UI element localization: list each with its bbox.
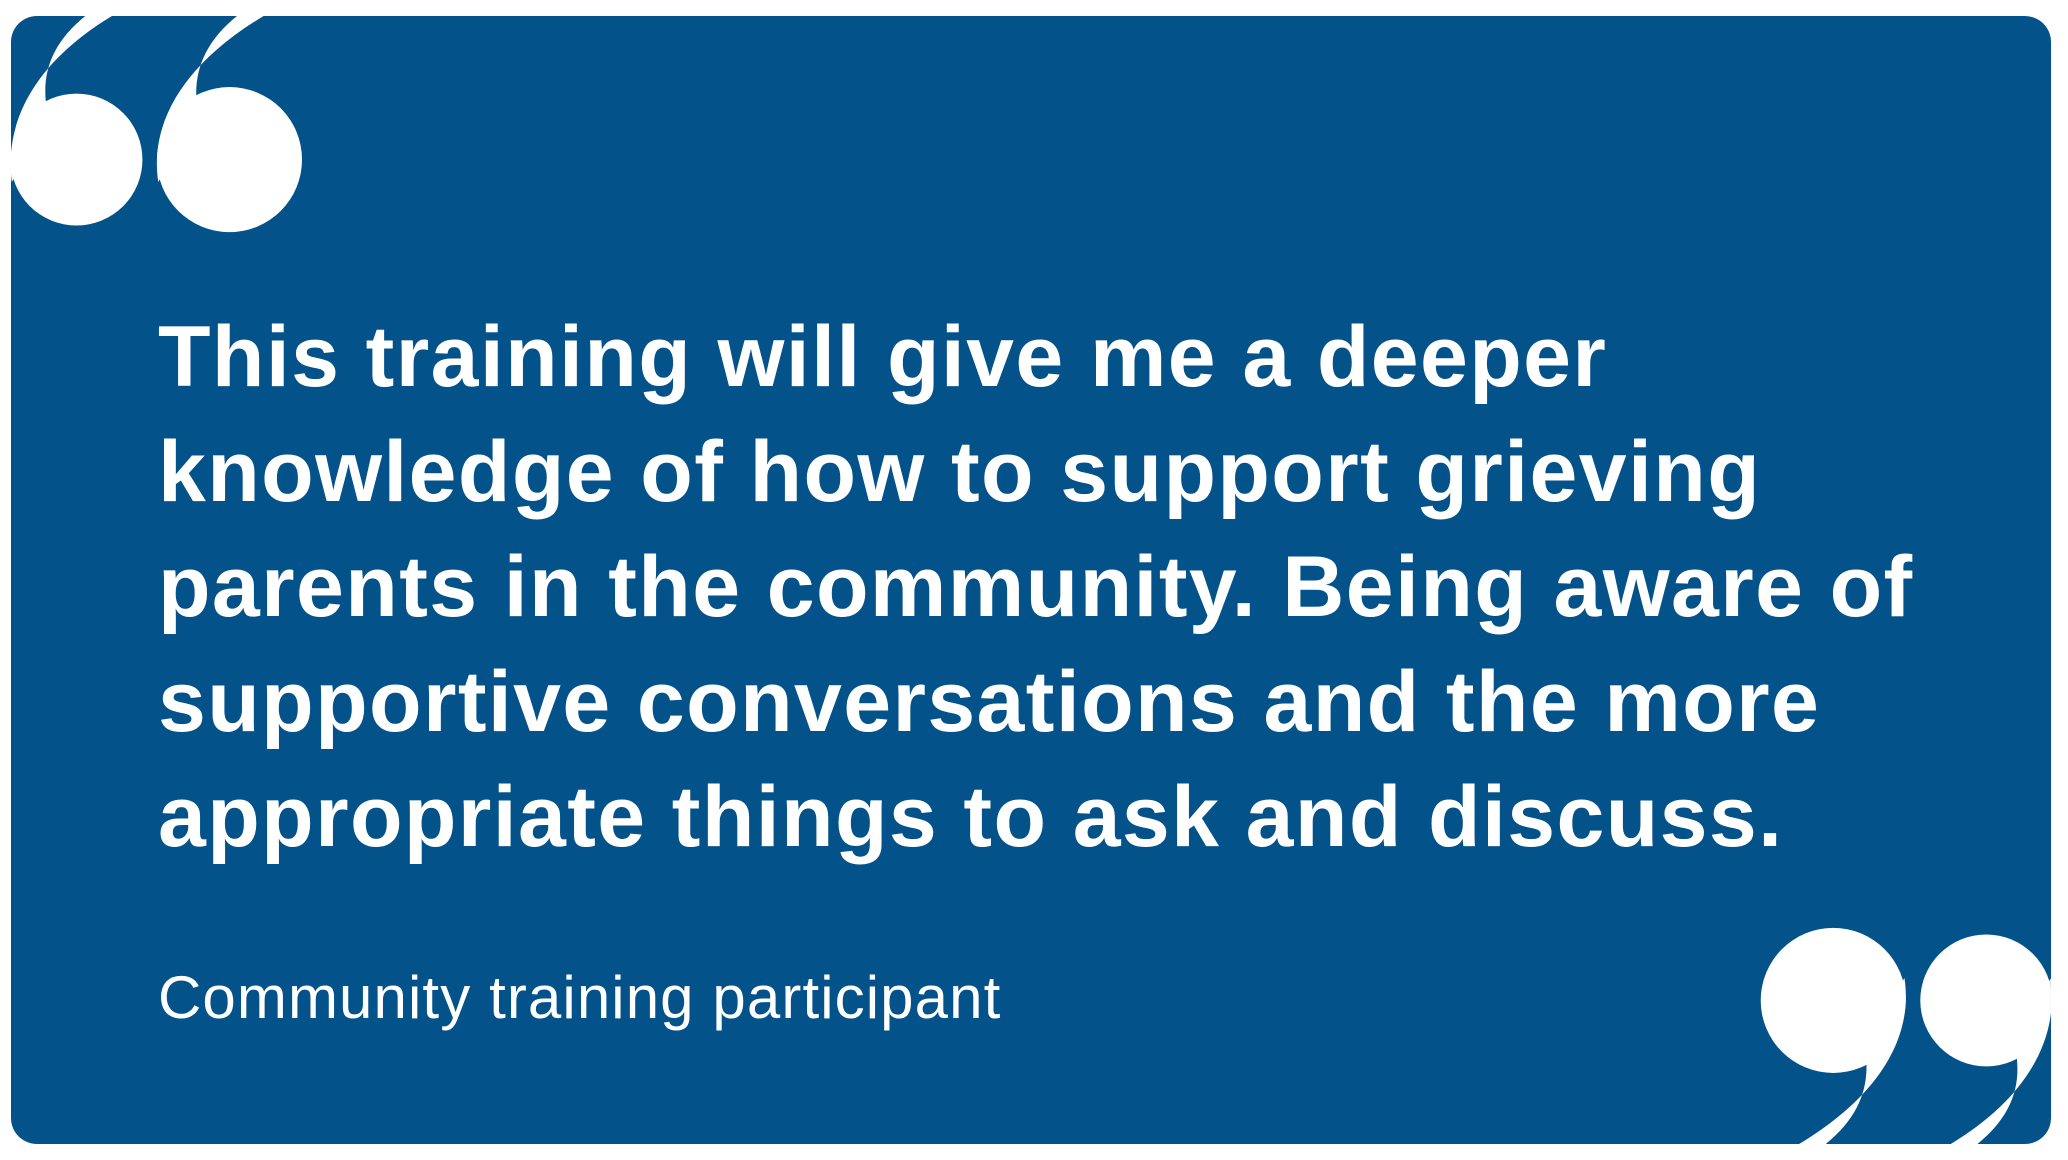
icon: closing quote (1761, 928, 2052, 1149)
text block: quote: parents in the community. Being aware of (158, 539, 1914, 635)
text block: quote: This training will give me a deeper (158, 309, 1607, 405)
text block: attribution: Community training participant (158, 964, 1001, 1031)
icon: opening quote (11, 11, 302, 232)
text block: quote (158, 309, 1914, 865)
text block: quote: appropriate things to ask and discuss. (158, 769, 1783, 865)
text block: quote: supportive conversations and the more (158, 654, 1820, 750)
text block: quote: knowledge of how to support grieving (158, 424, 1761, 520)
